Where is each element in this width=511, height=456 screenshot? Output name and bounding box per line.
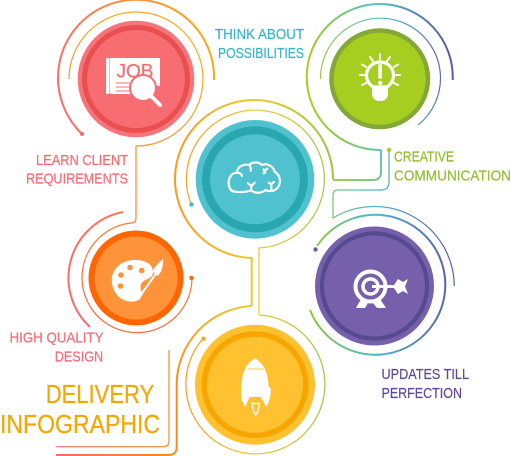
label: updates till perfection: PERFECTION [382, 385, 462, 402]
circle: palette [88, 230, 184, 326]
circle: job search [78, 21, 194, 137]
label: learn client requirements [26, 152, 128, 188]
title [0, 381, 160, 439]
icon: job newspaper with magnifier: JOB [116, 62, 154, 82]
connector dot: orange [189, 276, 194, 280]
label: updates till perfection: UPDATES TILL [382, 366, 469, 383]
label: think about possibilities [215, 26, 304, 62]
connector: title underline [56, 350, 169, 447]
circle: idea [329, 28, 430, 129]
label: high quality design [10, 330, 104, 365]
connector: green outer arc [307, 4, 453, 150]
label: high quality design: DESIGN [55, 348, 103, 365]
connector: yellow inner arc [186, 315, 325, 454]
connector: purple thick arc [310, 215, 445, 355]
label: creative communication: CREATIVE [394, 148, 454, 166]
icon: rocket [241, 358, 271, 415]
circle: target [315, 226, 434, 346]
connector: red outer arc [58, 0, 214, 136]
connector: yellow bottom stroke [56, 384, 177, 455]
title: INFOGRAPHIC [0, 411, 160, 439]
connector: creative label line [333, 148, 454, 286]
connector: green lower join [333, 150, 381, 180]
label: think about possibilities: THINK ABOUT [215, 26, 304, 43]
label: learn client requirements: REQUIREMENTS [26, 170, 128, 188]
connector: red inner arc linking to orange circle [69, 12, 203, 333]
label: think about possibilities: POSSIBILITIES [218, 45, 304, 62]
label: creative communication [394, 148, 511, 184]
circle: rocket [195, 325, 315, 445]
connector: teal inner arc [186, 110, 324, 315]
title: DELIVERY [46, 381, 154, 409]
connector: green thin arc [320, 18, 440, 125]
connector: teal outer arc [175, 100, 333, 306]
label: high quality design: HIGH QUALITY [10, 330, 104, 347]
circle: brain [196, 120, 314, 239]
label: updates till perfection [382, 366, 469, 402]
label: learn client requirements: LEARN CLIENT [36, 152, 128, 169]
connector: orange outer arc [69, 212, 123, 327]
connector: yellow outer arc [177, 306, 252, 385]
icon: light bulb [360, 54, 400, 101]
icon: archery target [356, 272, 408, 308]
icon: brain [229, 162, 280, 193]
icon: painter palette [112, 259, 163, 302]
